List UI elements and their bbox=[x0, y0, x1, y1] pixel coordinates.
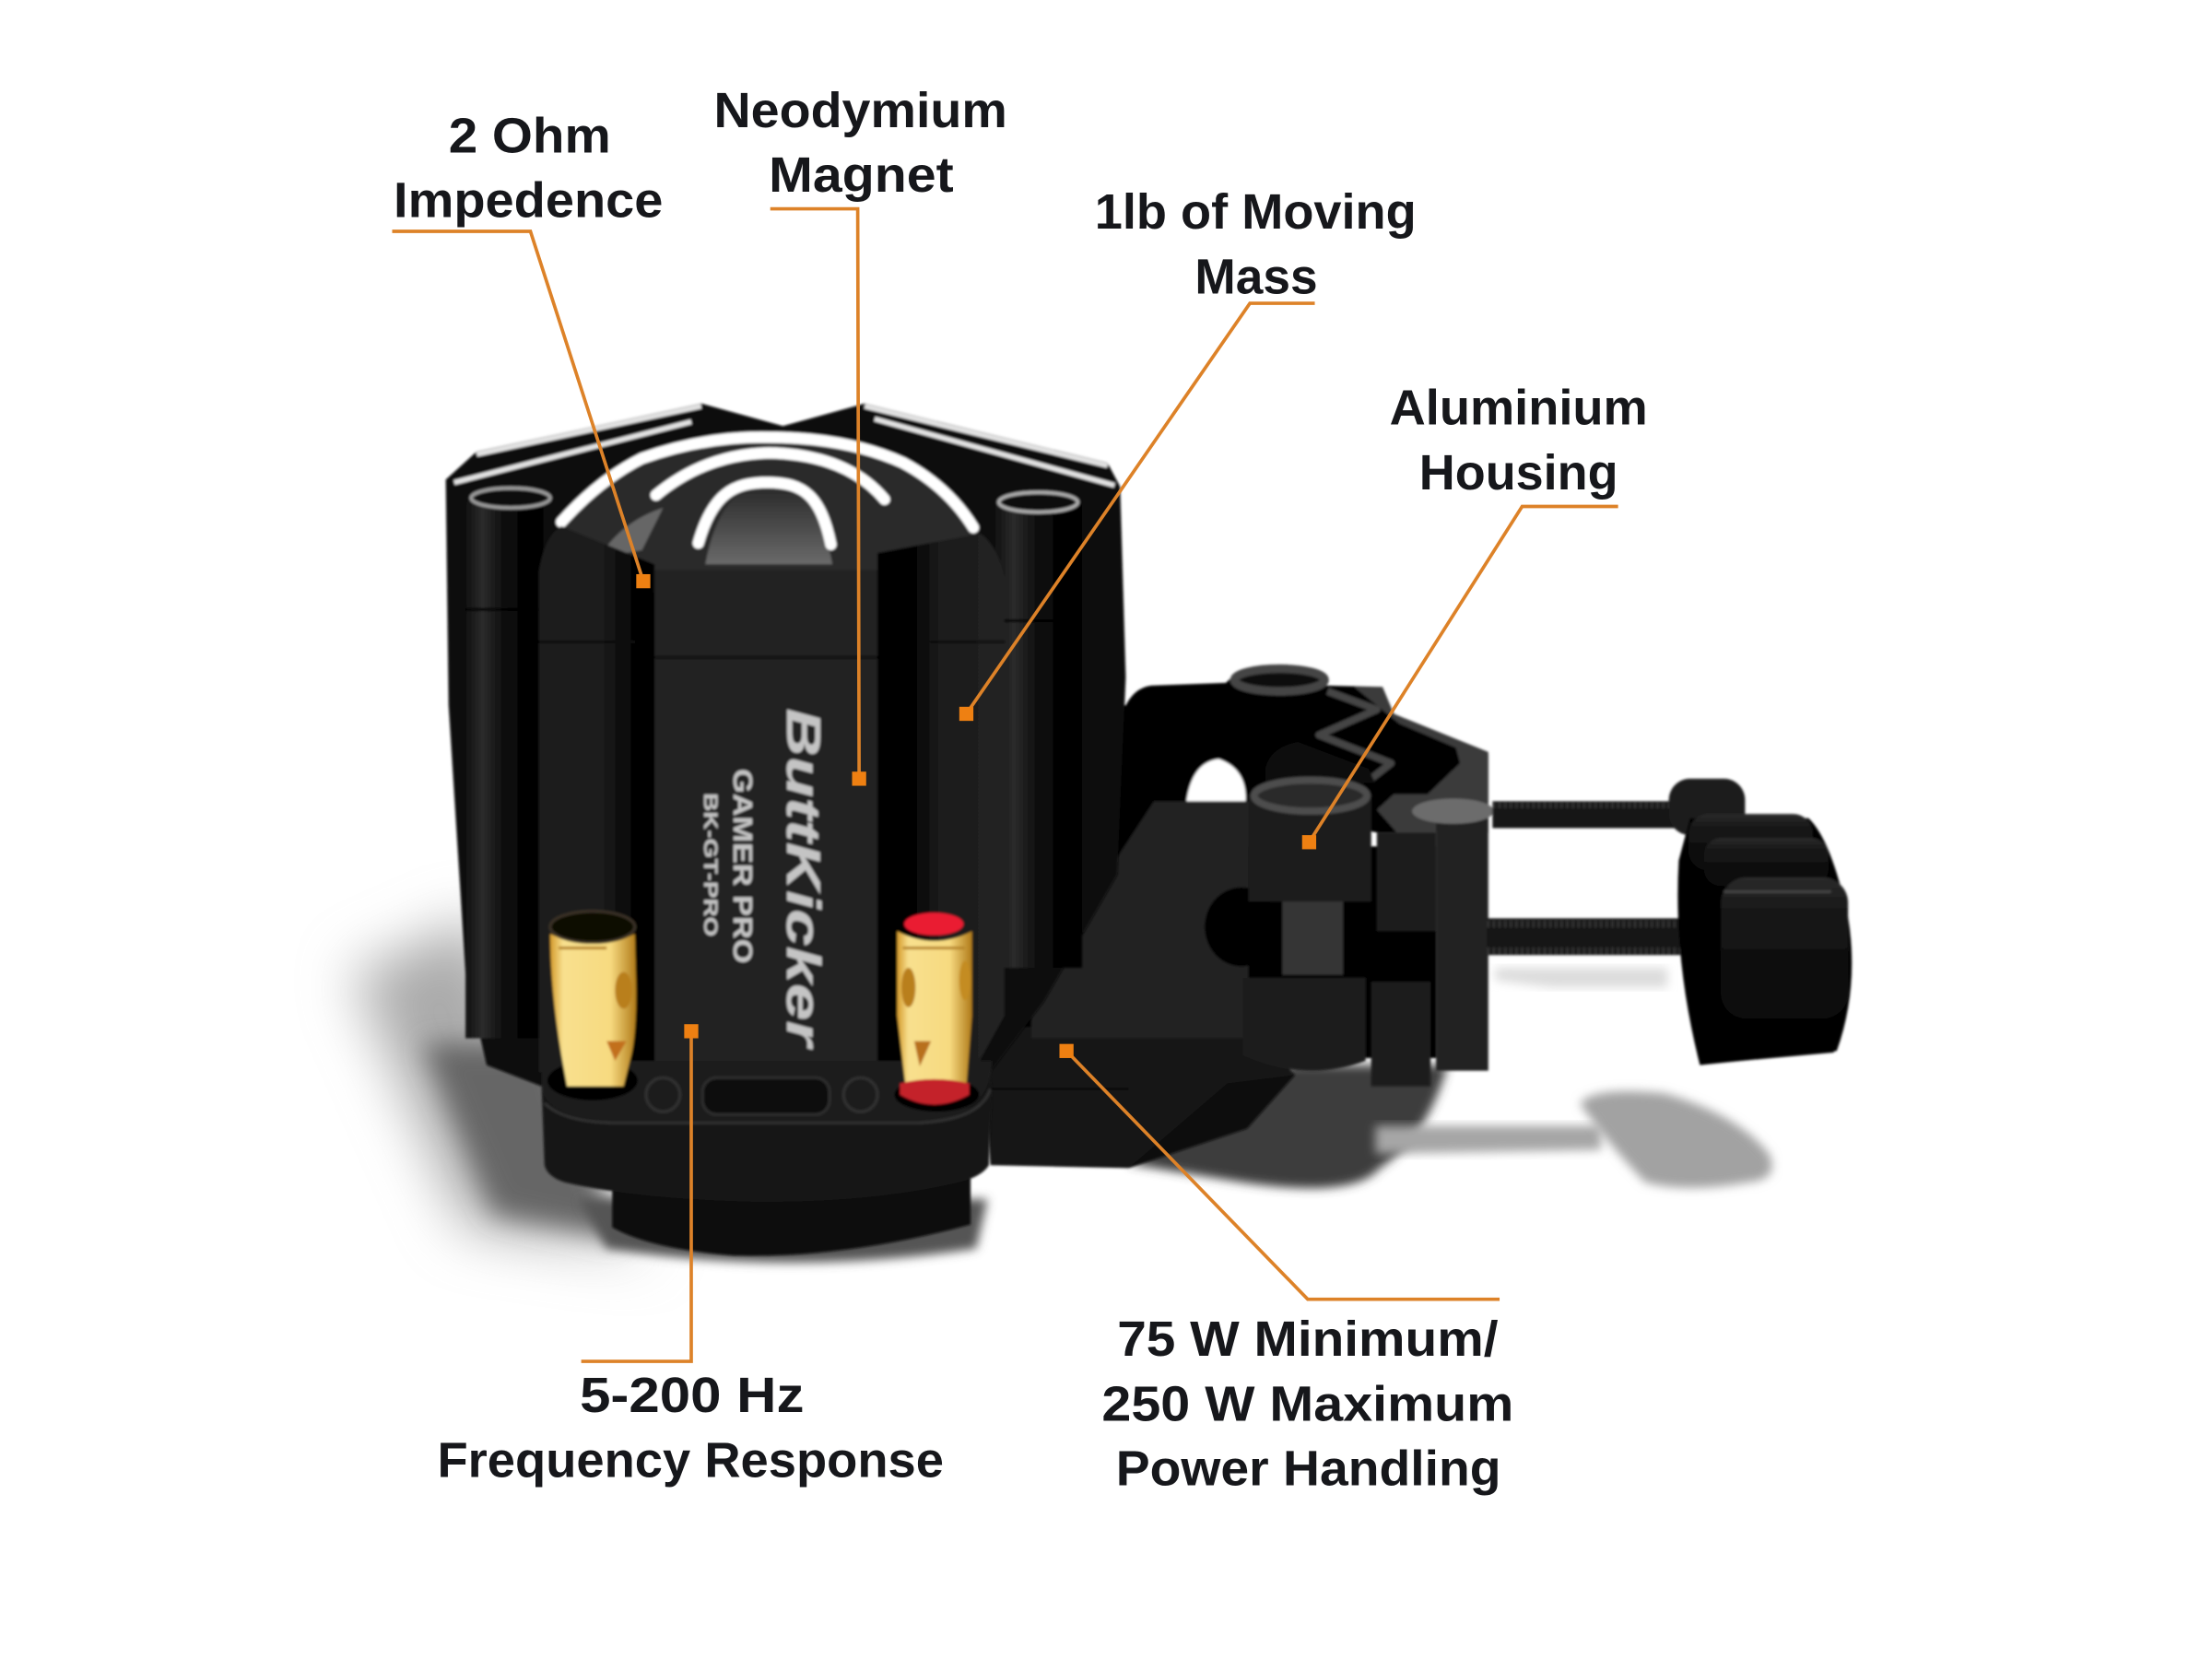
front left column bbox=[539, 526, 654, 1072]
left gold terminal bbox=[550, 912, 636, 1087]
clamp bracket ribs bbox=[1319, 691, 1391, 779]
left post recess bbox=[547, 1061, 638, 1100]
clamp grey disc bbox=[1412, 798, 1494, 824]
label: Neodymium Magnet: Neodymium bbox=[713, 84, 1007, 138]
label: Neodymium Magnet: Magnet bbox=[769, 148, 954, 203]
dark fill between body and clamp bbox=[973, 705, 1168, 1051]
top dome bbox=[550, 434, 987, 593]
right post recess bbox=[894, 1077, 979, 1112]
white arc inner bbox=[699, 482, 831, 545]
leader: power handling bbox=[1059, 1044, 1500, 1300]
cast shadows bbox=[353, 917, 1772, 1263]
top chevron right bbox=[865, 406, 1114, 486]
brand text on plate: ButtKicker bbox=[776, 708, 830, 1051]
leader: 1lb of Moving Mass bbox=[959, 303, 1315, 721]
brand text on plate: GAMER PRO bbox=[727, 769, 757, 963]
top threaded rod bbox=[1492, 801, 1676, 828]
brand text on plate: BK-GT-PRO bbox=[700, 793, 722, 936]
leader: Neodymium Magnet bbox=[771, 209, 866, 786]
brand text on plate bbox=[700, 708, 830, 1051]
rear right column bbox=[994, 492, 1082, 968]
clamp nut bbox=[1282, 901, 1343, 975]
label: Aluminium Housing bbox=[1390, 382, 1648, 500]
screw icons on base bbox=[646, 1077, 877, 1112]
bottom threaded rod bbox=[1487, 918, 1715, 955]
label: power handling bbox=[1101, 1312, 1513, 1497]
foot bbox=[612, 1171, 971, 1255]
label: 5-200 Hz Frequency Response: 5-200 Hz bbox=[580, 1369, 804, 1423]
clamp recess bbox=[1205, 888, 1278, 966]
clamp right blocks bbox=[1377, 832, 1436, 931]
label: Aluminium Housing: Aluminium bbox=[1390, 382, 1648, 436]
leader: Aluminium Housing bbox=[1302, 506, 1618, 849]
USB port bbox=[702, 1077, 830, 1114]
label: 2 Ohm Impedence: 2 Ohm bbox=[449, 109, 611, 163]
label: power handling: Power Handling bbox=[1116, 1442, 1501, 1497]
label: power handling: 75 W Minimum/ bbox=[1117, 1312, 1499, 1367]
leader: 5-200 Hz bbox=[582, 1024, 699, 1361]
label: 2 Ohm Impedence: Impedence bbox=[394, 174, 663, 229]
top chevron left bbox=[454, 406, 701, 482]
label: 5-200 Hz Frequency Response bbox=[437, 1369, 944, 1488]
product: transducer body bbox=[446, 404, 1125, 1255]
label: Aluminium Housing: Housing bbox=[1419, 446, 1618, 500]
clamp front angled plate bbox=[1031, 801, 1250, 1039]
clamp lower base bbox=[981, 1027, 1295, 1168]
center plate bbox=[654, 570, 877, 1087]
clamp bracket outer wall bbox=[1354, 687, 1488, 832]
leader: 2 Ohm Impedence bbox=[393, 231, 651, 588]
label: 2 Ohm Impedence bbox=[394, 109, 663, 229]
clamp top bolt hole bbox=[1234, 669, 1324, 691]
clamp column ring bbox=[1254, 780, 1367, 811]
body silhouette bbox=[446, 404, 1125, 1087]
clamp round cutout bbox=[1186, 759, 1246, 801]
white arc middle bbox=[656, 453, 885, 500]
star knob bbox=[1677, 814, 1852, 1065]
base bbox=[542, 1061, 992, 1202]
clamp back plate bbox=[1120, 667, 1488, 832]
front right column bbox=[877, 534, 1005, 1072]
product: clamp bracket and knob bbox=[973, 667, 1852, 1168]
label: 1lb of Moving Mass bbox=[1095, 185, 1417, 304]
right gold terminal with red cap bbox=[897, 912, 972, 1104]
white arc outer bbox=[561, 437, 973, 527]
clamp inner dark fill bbox=[1249, 846, 1436, 1058]
label: power handling: 250 W Maximum bbox=[1101, 1377, 1513, 1431]
clamp lower column bbox=[1242, 978, 1366, 1071]
label: 5-200 Hz Frequency Response: Frequency Response bbox=[437, 1434, 944, 1488]
label: 1lb of Moving Mass: Mass bbox=[1194, 250, 1318, 304]
rear left column bbox=[465, 488, 550, 1039]
label: Neodymium Magnet bbox=[713, 84, 1007, 203]
small lock nut bbox=[1669, 779, 1745, 835]
clamp rear hump bbox=[1265, 742, 1375, 782]
label: 1lb of Moving Mass: 1lb of Moving bbox=[1095, 185, 1417, 240]
clamp upper column bbox=[1249, 794, 1371, 901]
